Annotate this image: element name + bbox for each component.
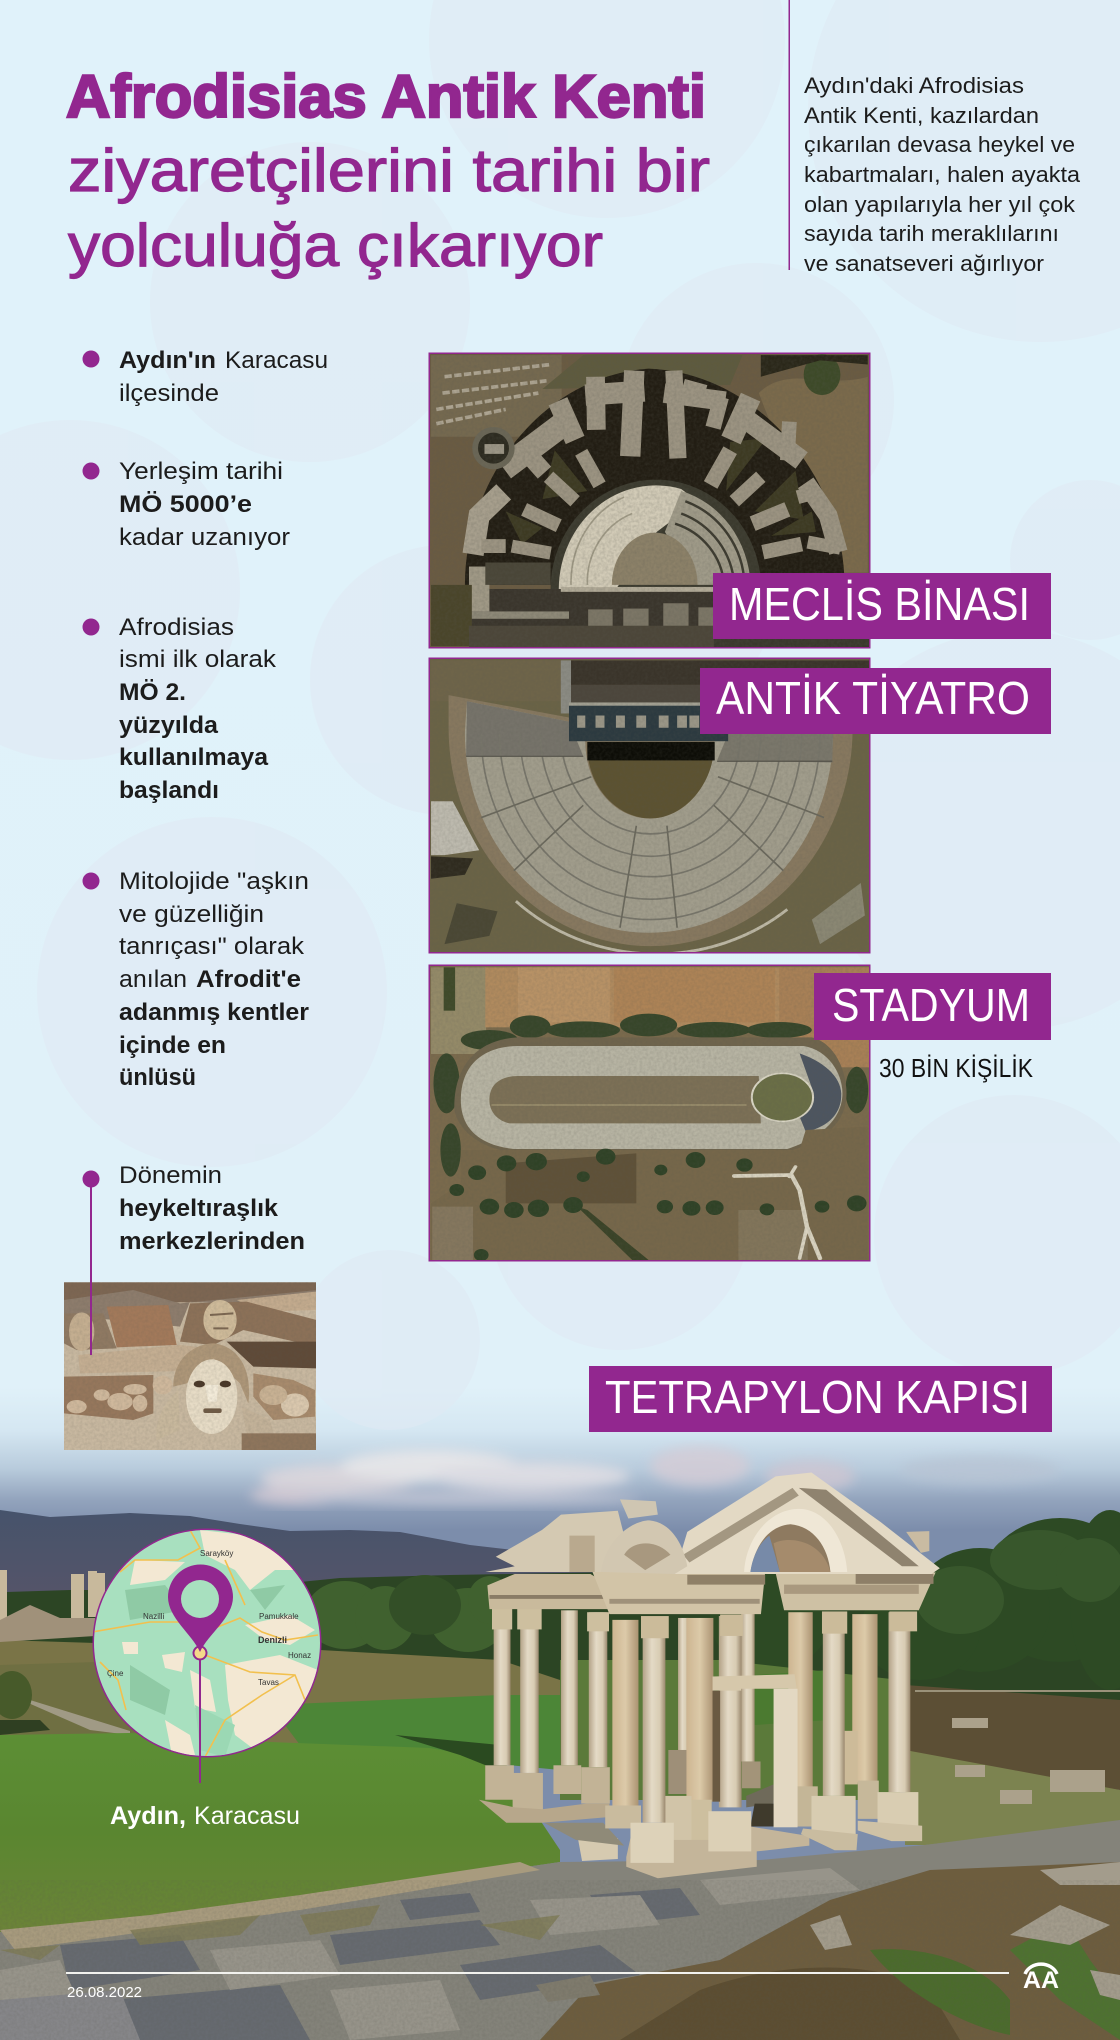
entablature (487, 1567, 936, 1614)
label: stadyum: STADYUM (832, 979, 1030, 1031)
intro paragraph: kabartmaları, halen ayakta (804, 162, 1081, 187)
seating (551, 480, 761, 589)
bullet 3: yüzyılda (119, 712, 219, 739)
tree ring (433, 1014, 868, 1177)
door frame (713, 1674, 798, 1827)
bullet 4: Afrodit'e (196, 966, 301, 993)
photo: stadyum (420, 963, 877, 1263)
ruined columns (0, 1570, 105, 1620)
bullet 4: tanrıçası" olarak (119, 933, 305, 960)
stage (569, 705, 728, 741)
bullet 4: ve güzelliğin (119, 901, 264, 928)
bullet 4: Mitolojide "aşkın (119, 868, 309, 895)
bullet 1 (82, 347, 328, 407)
clouds (250, 1446, 1060, 1505)
bullet 1: Karacasu (225, 347, 328, 374)
bullet 2: kadar uzanıyor (119, 524, 290, 551)
main piers (605, 1612, 879, 1840)
arch (744, 1509, 847, 1572)
bullet 5 with leader line: heykeltıraşlık (119, 1195, 279, 1222)
tetrapylon gate (479, 1473, 940, 1878)
map place names: Denizli (258, 1635, 287, 1645)
dark rooms (465, 369, 844, 585)
intro paragraph: Antik Kenti, kazılardan (804, 103, 1039, 128)
lower area (460, 1129, 825, 1153)
footer rule (66, 1972, 1009, 1974)
map place names: Honaz (288, 1651, 311, 1660)
bottom landscape photo (0, 1446, 1120, 2040)
bullet 3: kullanılmaya (119, 744, 269, 771)
bullet 5 with leader line: Dönemin (119, 1162, 222, 1189)
map place names: Sarayköy (200, 1549, 233, 1558)
map place names: Çine (107, 1669, 124, 1678)
seating (465, 701, 833, 933)
location label: Aydın, (110, 1802, 186, 1830)
bullet 5 with leader line (82, 1162, 305, 1355)
right field (905, 1685, 1120, 1790)
title: ziyaretçilerini tarihi bir (68, 137, 710, 204)
small dome (601, 1520, 687, 1574)
bullet 4: içinde en (119, 1032, 226, 1059)
floor platform (626, 1827, 809, 1878)
label: meclis binası: MECLİS BİNASI (729, 578, 1030, 630)
track (489, 1076, 761, 1123)
bottom stage (472, 589, 713, 626)
intro paragraph (804, 73, 1081, 276)
locator map (90, 1525, 325, 1760)
intro paragraph: çıkarılan devasa heykel ve (804, 132, 1075, 157)
intro paragraph: Aydın'daki Afrodisias (804, 73, 1024, 98)
radial walls (473, 371, 840, 554)
trees (449, 1149, 867, 1261)
photo: relief masks (64, 1282, 317, 1450)
date: 26.08.2022 (67, 1984, 142, 2001)
bullet 4: ünlüsü (119, 1064, 196, 1091)
bullet 4 (82, 868, 309, 1091)
foreground grass (0, 1733, 560, 1932)
label: tetrapylon kapısı: TETRAPYLON KAPISI (605, 1371, 1030, 1423)
mid ground (0, 1640, 560, 1760)
bullet 5 with leader line: merkezlerinden (119, 1228, 305, 1255)
intro paragraph: sayıda tarih meraklılarını (804, 221, 1059, 246)
bullet 2: MÖ 5000’e (119, 491, 252, 518)
title: yolculuğa çıkarıyor (68, 212, 603, 279)
intro paragraph: ve sanatseveri ağırlıyor (804, 251, 1044, 276)
bullet 2: Yerleşim tarihi (119, 458, 283, 485)
back left columns (479, 1608, 610, 1823)
bullet 1: Aydın'ın (119, 347, 216, 374)
bullet 2 (82, 458, 290, 551)
brown ground and bushes (540, 1862, 1120, 2040)
far trees (0, 1572, 1120, 1720)
location label (110, 1802, 300, 1830)
title (66, 63, 710, 279)
title: Afrodisias Antik Kenti (66, 63, 706, 130)
divider line (788, 0, 790, 270)
map land patches (122, 1530, 318, 1755)
bullet 3 (82, 614, 277, 804)
stone pavement (0, 1819, 1120, 2040)
bullet 1: ilçesinde (119, 380, 219, 407)
photo: meclis binası (428, 352, 870, 648)
caption: stadium capacity: 30 BİN KİŞİLİK (879, 1053, 1034, 1083)
label: antik tiyatro: ANTİK TİYATRO (716, 672, 1030, 724)
bullet 3: ismi ilk olarak (119, 646, 277, 673)
intro paragraph: olan yapılarıyla her yıl çok (804, 192, 1076, 217)
bullet 3: başlandı (119, 777, 219, 804)
map place names: Tavas (258, 1678, 279, 1687)
seating ring (461, 1046, 842, 1149)
photo: antik tiyatro (420, 654, 877, 960)
map pin (168, 1564, 233, 1783)
map place names: Pamukkale (259, 1612, 299, 1621)
white path (734, 1167, 820, 1258)
map place names: Nazilli (143, 1612, 165, 1621)
left broken roof (485, 1511, 624, 1572)
orchestra (587, 742, 714, 818)
front columns (630, 1611, 922, 1863)
bullet 4: adanmış kentler (119, 999, 309, 1026)
map place names (107, 1549, 311, 1687)
location label: Karacasu (194, 1802, 300, 1830)
pediment (675, 1473, 940, 1574)
rear shadowed piers (668, 1612, 776, 1827)
bullet 3: Afrodisias (119, 614, 234, 641)
outer aisle (449, 695, 853, 946)
bullet 3: MÖ 2. (119, 679, 186, 706)
map roads (92, 1530, 318, 1757)
icon: AA logo: AA (1023, 1967, 1059, 1994)
bullet 4: anılan (119, 966, 187, 993)
